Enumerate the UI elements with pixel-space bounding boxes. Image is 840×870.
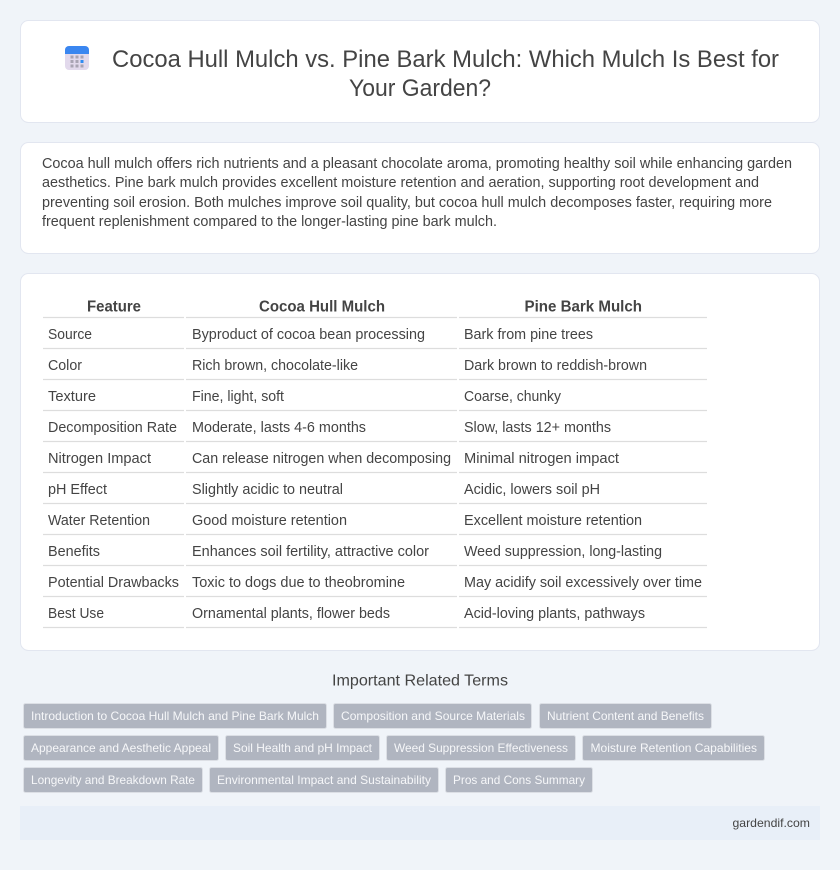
row: nitrogen impact bbox=[48, 451, 619, 467]
row: texture bbox=[48, 389, 562, 405]
tag list: related terms: Composition and Source Materials bbox=[341, 709, 525, 723]
text block: summary paragraph: preventing soil erosion. Both mulches improve soil quality, but cocoa hull mulch decomposes faster, requiring more bbox=[42, 195, 772, 211]
row: benefits bbox=[48, 544, 662, 560]
row: nitrogen impact: Nitrogen Impact bbox=[48, 451, 151, 467]
tag list: related terms: Environmental Impact and Sustainability bbox=[217, 773, 431, 787]
row: source: Bark from pine trees bbox=[464, 327, 593, 343]
row: pH effect: Slightly acidic to neutral bbox=[192, 482, 343, 498]
tag list: related terms: Soil Health and pH Impact bbox=[233, 741, 373, 755]
title bbox=[112, 46, 779, 102]
tag list: related terms: Weed Suppression Effectiveness bbox=[394, 741, 568, 755]
footer bbox=[20, 806, 820, 840]
row: potential drawbacks: Toxic to dogs due to theobromine bbox=[192, 575, 405, 591]
row: decomposition rate: Moderate, lasts 4-6 months bbox=[192, 420, 366, 436]
text block: summary paragraph: Cocoa hull mulch offers rich nutrients and a pleasant chocolate aroma, promoting healthy soil while enhancing garden bbox=[42, 156, 792, 172]
tag list: related terms: Longevity and Breakdown Rate bbox=[31, 773, 195, 787]
table header: Pine Bark Mulch bbox=[524, 298, 642, 316]
heading: important related terms: Important Related Terms bbox=[332, 672, 508, 690]
row: water retention: Good moisture retention bbox=[192, 513, 347, 529]
row: texture: Texture bbox=[48, 389, 96, 405]
row: color: Color bbox=[48, 358, 82, 374]
panel: comparison table bbox=[20, 274, 820, 650]
title: Your Garden? bbox=[349, 75, 491, 102]
row: nitrogen impact: Minimal nitrogen impact bbox=[464, 451, 619, 467]
panel: introduction bbox=[20, 142, 820, 254]
footer: gardendif.com bbox=[732, 816, 810, 830]
tag list: related terms: Appearance and Aesthetic Appeal bbox=[31, 741, 211, 755]
row: source: Byproduct of cocoa bean processing bbox=[192, 327, 425, 343]
tag list: related terms: Nutrient Content and Benefits bbox=[547, 709, 704, 723]
row: water retention: Water Retention bbox=[48, 513, 150, 529]
row: source bbox=[48, 327, 593, 343]
row: color: Dark brown to reddish-brown bbox=[464, 358, 647, 374]
row: pH effect: Acidic, lowers soil pH bbox=[464, 482, 600, 498]
row: source: Source bbox=[48, 327, 92, 343]
row: best use bbox=[48, 606, 645, 622]
tag list: related terms: Pros and Cons Summary bbox=[453, 773, 585, 787]
row: potential drawbacks bbox=[48, 575, 702, 591]
row: best use: Ornamental plants, flower beds bbox=[192, 606, 390, 622]
tag list: related terms bbox=[24, 704, 764, 792]
row: benefits: Weed suppression, long-lasting bbox=[464, 544, 662, 560]
row: texture: Coarse, chunky bbox=[464, 389, 562, 405]
row: potential drawbacks: May acidify soil excessively over time bbox=[464, 575, 702, 591]
row: color: Rich brown, chocolate-like bbox=[192, 358, 358, 374]
icon: calendar bbox=[65, 46, 89, 70]
row: nitrogen impact: Can release nitrogen when decomposing bbox=[192, 451, 451, 467]
title: Cocoa Hull Mulch vs. Pine Bark Mulch: Which Mulch Is Best for bbox=[112, 46, 779, 73]
panel: title card bbox=[20, 20, 820, 122]
row: potential drawbacks: Potential Drawbacks bbox=[48, 575, 179, 591]
text block: summary paragraph: aesthetics. Pine bark mulch provides excellent moisture retention and aeration, supporting root development and bbox=[42, 175, 759, 191]
row: pH effect: pH Effect bbox=[48, 482, 107, 498]
text block: summary paragraph: frequent replenishment compared to the longer-lasting pine bark mulch. bbox=[42, 214, 497, 230]
row: color bbox=[48, 358, 647, 374]
row: decomposition rate: Slow, lasts 12+ months bbox=[464, 420, 611, 436]
row: pH effect bbox=[48, 482, 600, 498]
row: decomposition rate: Decomposition Rate bbox=[48, 420, 177, 436]
text block: summary paragraph bbox=[42, 156, 792, 230]
tag list: related terms: Moisture Retention Capabilities bbox=[590, 741, 757, 755]
row: best use: Acid-loving plants, pathways bbox=[464, 606, 645, 622]
table header: Feature bbox=[87, 298, 141, 316]
row: best use: Best Use bbox=[48, 606, 104, 622]
tag list: related terms: Introduction to Cocoa Hull Mulch and Pine Bark Mulch bbox=[31, 709, 319, 723]
row: texture: Fine, light, soft bbox=[192, 389, 284, 405]
table header bbox=[87, 298, 642, 316]
row: water retention: Excellent moisture retention bbox=[464, 513, 642, 529]
row: benefits: Enhances soil fertility, attractive color bbox=[192, 544, 429, 560]
row: water retention bbox=[48, 513, 642, 529]
row: decomposition rate bbox=[48, 420, 611, 436]
table header: Cocoa Hull Mulch bbox=[259, 298, 385, 316]
row: benefits: Benefits bbox=[48, 544, 100, 560]
